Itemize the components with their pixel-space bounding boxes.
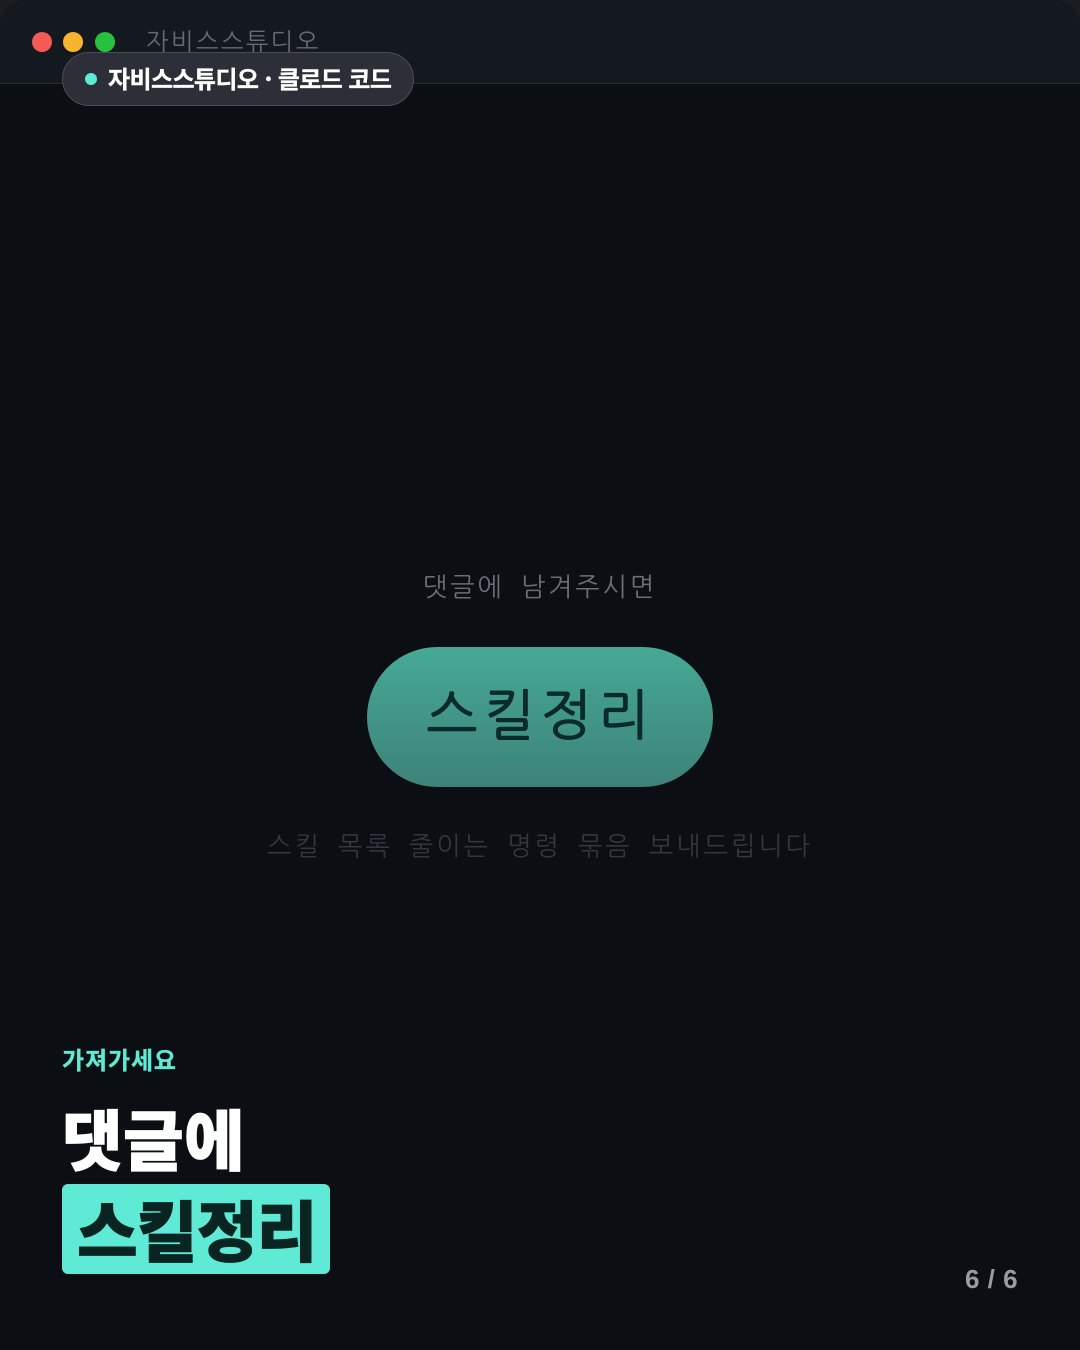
- icon: green window dot: [95, 32, 115, 52]
- badge text: 자비스스튜디오 · 클로드 코드: [108, 60, 391, 95]
- keyword pill button: [367, 647, 713, 787]
- heading: highlighted keyword: [62, 1184, 330, 1274]
- brand badge: [62, 52, 414, 106]
- highlighted keyword text: 스킬정리: [77, 1180, 317, 1276]
- window title bar: [0, 0, 1080, 84]
- window title text: 자비스스튜디오: [146, 30, 321, 54]
- icon: badge status dot: [85, 73, 97, 85]
- intro text: 댓글에 남겨주시면: [423, 574, 657, 600]
- pill keyword text: 스킬정리: [426, 688, 656, 742]
- icon: yellow window dot: [63, 32, 83, 52]
- heading: line one: 댓글에: [62, 1089, 245, 1185]
- icon: red window dot: [32, 32, 52, 52]
- description text: 스킬 목록 줄이는 명령 묶음 보내드립니다: [267, 833, 813, 859]
- eyebrow label: 가져가세요: [62, 1041, 177, 1076]
- page number: 6 / 6: [965, 1264, 1018, 1294]
